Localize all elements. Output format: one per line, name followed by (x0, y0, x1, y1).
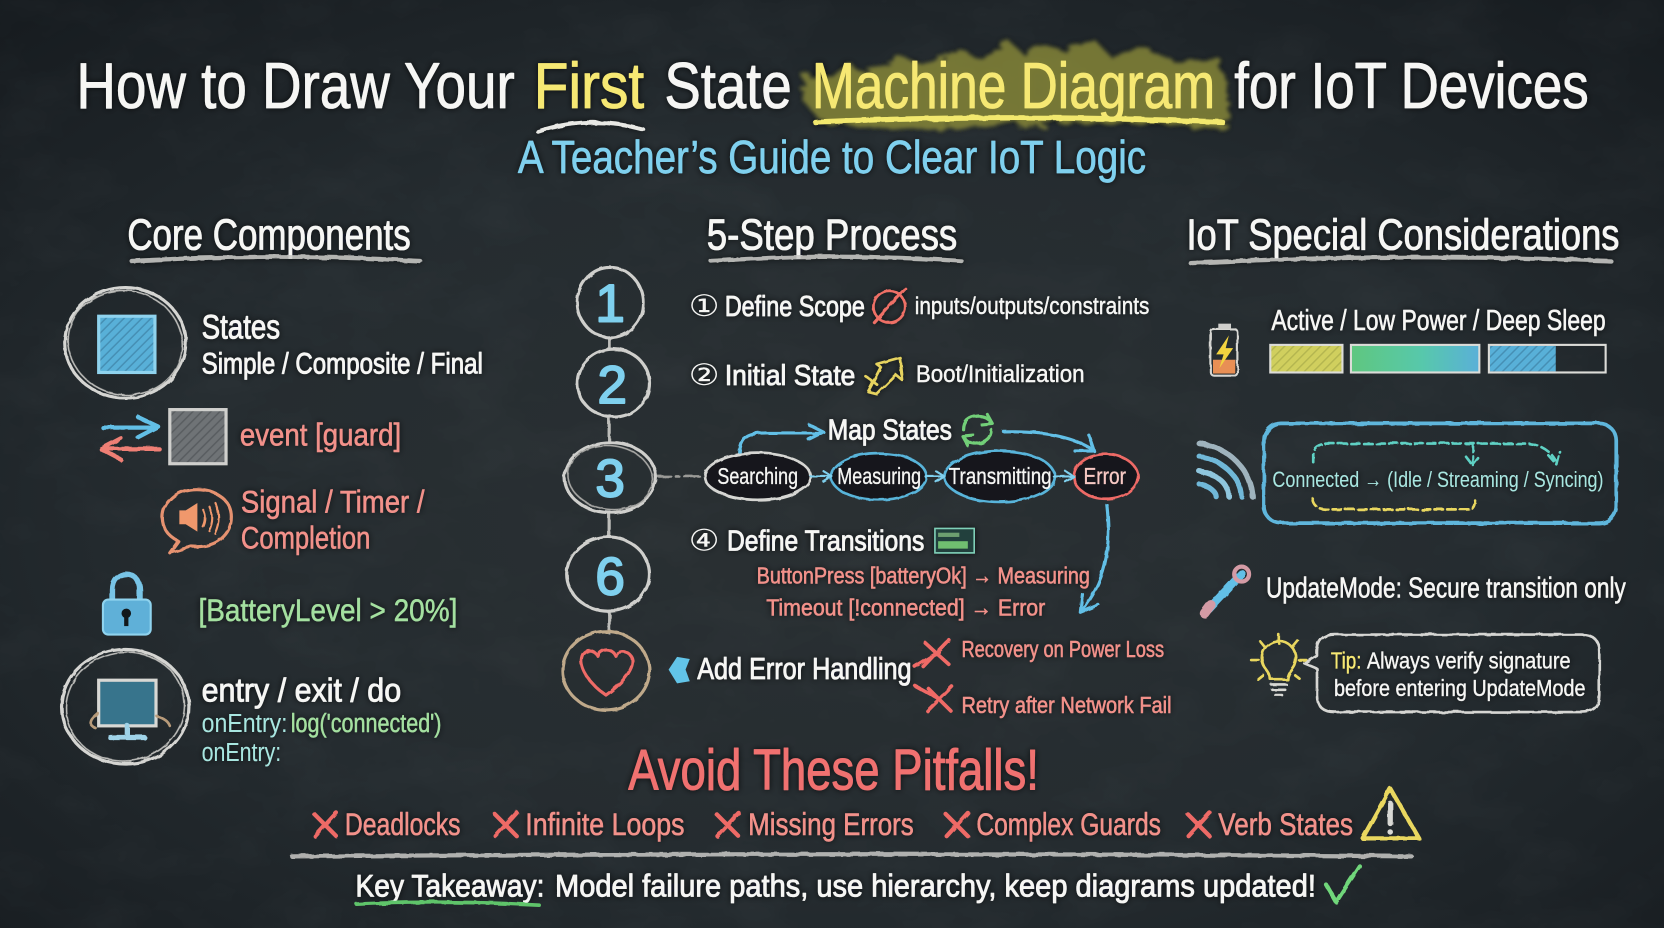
state oval: Searching (705, 453, 811, 500)
onEntry log text: onEntry: (202, 710, 288, 738)
state oval: Measuring (831, 453, 926, 500)
pitfalls heading: Avoid These Pitfalls! (628, 739, 1039, 803)
panel: IoT special considerations (1199, 305, 1626, 712)
step 2 initial state: ② (689, 358, 720, 393)
step 5 add error handling: Add Error Handling (697, 651, 912, 686)
green underline (357, 902, 539, 905)
icon: green cycle arrows (963, 414, 992, 446)
icon: transitions table (935, 528, 974, 553)
tip callout (1304, 635, 1599, 712)
icon: crossed target (873, 289, 905, 323)
icon: speech bubble with speaker (162, 489, 231, 553)
subtitle: A Teacher’s Guide to Clear IoT Logic (518, 131, 1146, 183)
heading: Core Components: Core Components (127, 211, 411, 259)
title underlines (538, 123, 643, 132)
onEntry log text (202, 710, 441, 738)
icon: blue bullet (669, 657, 690, 683)
onEntry log text: log('connected') (291, 710, 441, 738)
pitfall labels: Missing Errors (748, 806, 914, 842)
entry exit do text: entry / exit / do (202, 671, 401, 708)
pitfall labels: Deadlocks (345, 806, 461, 842)
step 1 define scope: Define Scope (725, 291, 865, 323)
event guard text: event [guard] (240, 417, 401, 453)
icon: check mark (1327, 866, 1359, 902)
tip callout: before entering UpdateMode (1334, 675, 1585, 701)
step 1 circle (577, 267, 643, 337)
title (76, 38, 1589, 132)
key takeaway: Key Takeaway: (356, 868, 544, 904)
pitfall labels: Infinite Loops (525, 806, 684, 842)
trigger types text (241, 484, 425, 556)
step 2 initial state: Initial State (725, 360, 855, 392)
step 5 add error handling: Recovery on Power Loss (961, 636, 1164, 662)
bar: low power (1351, 345, 1479, 372)
step 4 define transitions: Timeout [!connected] → Error (766, 594, 1046, 620)
pitfall labels: Complex Guards (976, 806, 1161, 842)
icon: warning triangle (1363, 788, 1419, 838)
step 2 initial state: Boot/Initialization (916, 361, 1085, 388)
state oval: Error (1074, 454, 1138, 499)
step 2 initial state (689, 358, 1085, 394)
heading: 5-Step Process: 5-Step Process (707, 211, 957, 259)
error branches with crosses (915, 640, 952, 711)
title highlight scribble (803, 38, 1231, 129)
step 4 define transitions: ④ (689, 524, 720, 559)
step 5 add error handling (669, 636, 1172, 718)
step 2 circle: 2 (598, 356, 627, 415)
step 6 circle (567, 537, 649, 611)
state oval: Error: Error (1084, 463, 1126, 489)
icon: transition arrows and square (101, 410, 226, 464)
pitfall crosses (314, 813, 1210, 836)
connected state box (1264, 423, 1616, 523)
step 2 circle (577, 349, 649, 417)
state oval: Measuring: Measuring (837, 463, 921, 489)
bar: deep sleep (1489, 345, 1606, 372)
arrow from error to transitions (1080, 505, 1108, 612)
title: Machine Diagram (812, 49, 1215, 122)
states text: States (202, 309, 280, 347)
step 1 define scope (689, 289, 1149, 324)
step 3 map states: Map States (828, 414, 952, 446)
icon: light bulb (1251, 635, 1306, 695)
pitfall labels (345, 806, 1353, 842)
panel: 5-step process (562, 267, 1172, 718)
tip callout: Tip: (1331, 648, 1362, 674)
step 6 circle: 6 (595, 547, 625, 606)
step 1 define scope: ① (689, 289, 720, 324)
pitfall labels: Verb States (1218, 806, 1353, 842)
process spine with numbered circles (562, 267, 706, 710)
pitfalls list (314, 788, 1419, 842)
icon: monitor in circle (57, 643, 193, 770)
trigger types text: Signal / Timer / (241, 484, 425, 520)
heart circle (562, 631, 649, 710)
title: State (664, 49, 792, 122)
onEntry garbled text: onEntry: (202, 739, 281, 767)
icon: battery (1211, 324, 1237, 376)
arrows over states (740, 424, 1094, 454)
guard condition text: [BatteryLevel > 20%] (198, 592, 457, 628)
step 1 circle: 1 (595, 275, 625, 334)
trigger types text: Completion (241, 520, 370, 556)
bar: active (1270, 345, 1342, 372)
title: How to Draw Your (76, 49, 515, 122)
states text (202, 309, 483, 381)
step 4 define transitions (689, 524, 1090, 620)
icon: wrench (1204, 567, 1249, 613)
icon: padlock (103, 574, 151, 635)
states text: Simple / Composite / Final (202, 348, 483, 381)
tip callout: Always verify signature (1367, 648, 1571, 674)
title: First (534, 49, 644, 122)
title: for IoT Devices (1234, 49, 1589, 122)
panel: core components (57, 280, 483, 770)
step 3 circle (564, 440, 657, 515)
divider (292, 854, 1411, 856)
key takeaway: Model failure paths, use hierarchy, keep diagrams updated! (555, 868, 1316, 904)
state oval: Transmitting (944, 451, 1055, 502)
step 4 define transitions: Define Transitions (727, 526, 924, 558)
step 3 circle: 3 (595, 450, 625, 509)
step 5 add error handling: Retry after Network Fail (961, 692, 1172, 718)
power mode bars (1270, 345, 1606, 372)
icon: state square in circle (58, 280, 192, 406)
state oval: Searching: Searching (717, 463, 798, 489)
step 4 define transitions: ButtonPress [batteryOk] → Measuring (757, 563, 1090, 589)
icon: yellow arrow (866, 358, 902, 394)
step 1 define scope: inputs/outputs/constraints (915, 293, 1149, 320)
state oval: Transmitting: Transmitting (949, 463, 1052, 489)
step 3 map states (705, 414, 1138, 502)
icon: wifi (1199, 444, 1252, 497)
arrows between states (811, 471, 1074, 482)
